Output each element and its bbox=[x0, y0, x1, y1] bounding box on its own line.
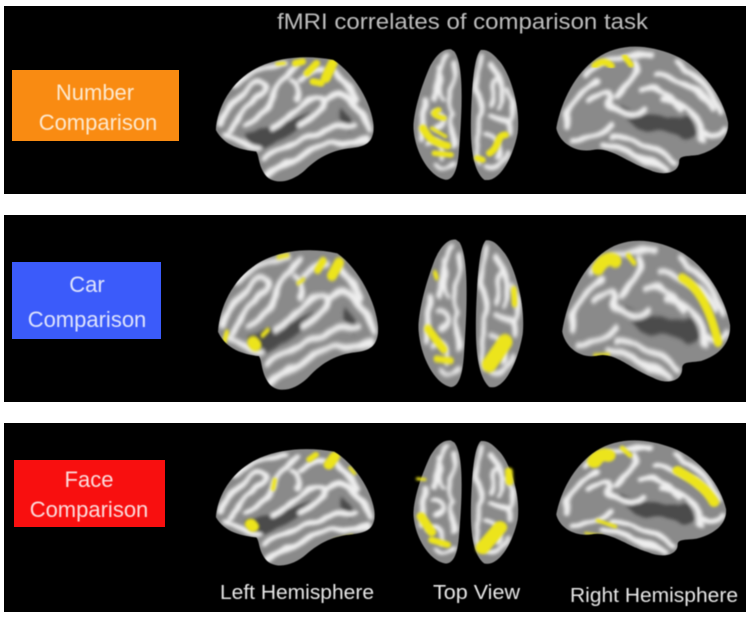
panel: face comparison bbox=[4, 423, 746, 612]
caption: left hemisphere: Left Hemisphere bbox=[220, 582, 374, 604]
label: number comparison: Comparison bbox=[39, 110, 157, 135]
label: car comparison: Car bbox=[69, 272, 105, 297]
label: number comparison bbox=[12, 70, 179, 141]
label: car comparison bbox=[12, 262, 161, 339]
label: face comparison bbox=[14, 460, 165, 527]
brain: top view bbox=[411, 47, 521, 183]
label: car comparison: Comparison bbox=[28, 307, 146, 332]
title: fMRI correlates of comparison task bbox=[277, 9, 649, 34]
brain: left hemisphere bbox=[215, 56, 374, 182]
label: number comparison: Number bbox=[56, 80, 134, 105]
caption: right hemisphere: Right Hemisphere bbox=[570, 585, 738, 607]
panel: number comparison bbox=[4, 6, 746, 194]
brain: right hemisphere bbox=[562, 240, 731, 382]
caption: top view: Top View bbox=[433, 582, 521, 604]
brain: right hemisphere bbox=[556, 440, 727, 556]
brain: left hemisphere bbox=[217, 250, 379, 390]
label: face comparison: Face bbox=[65, 467, 113, 492]
brain: left hemisphere bbox=[215, 448, 376, 566]
brain: right hemisphere bbox=[556, 46, 729, 174]
brain: top view bbox=[411, 438, 521, 567]
panel: car comparison bbox=[4, 215, 746, 402]
brain: top view bbox=[416, 237, 526, 391]
label: face comparison: Comparison bbox=[30, 497, 148, 522]
